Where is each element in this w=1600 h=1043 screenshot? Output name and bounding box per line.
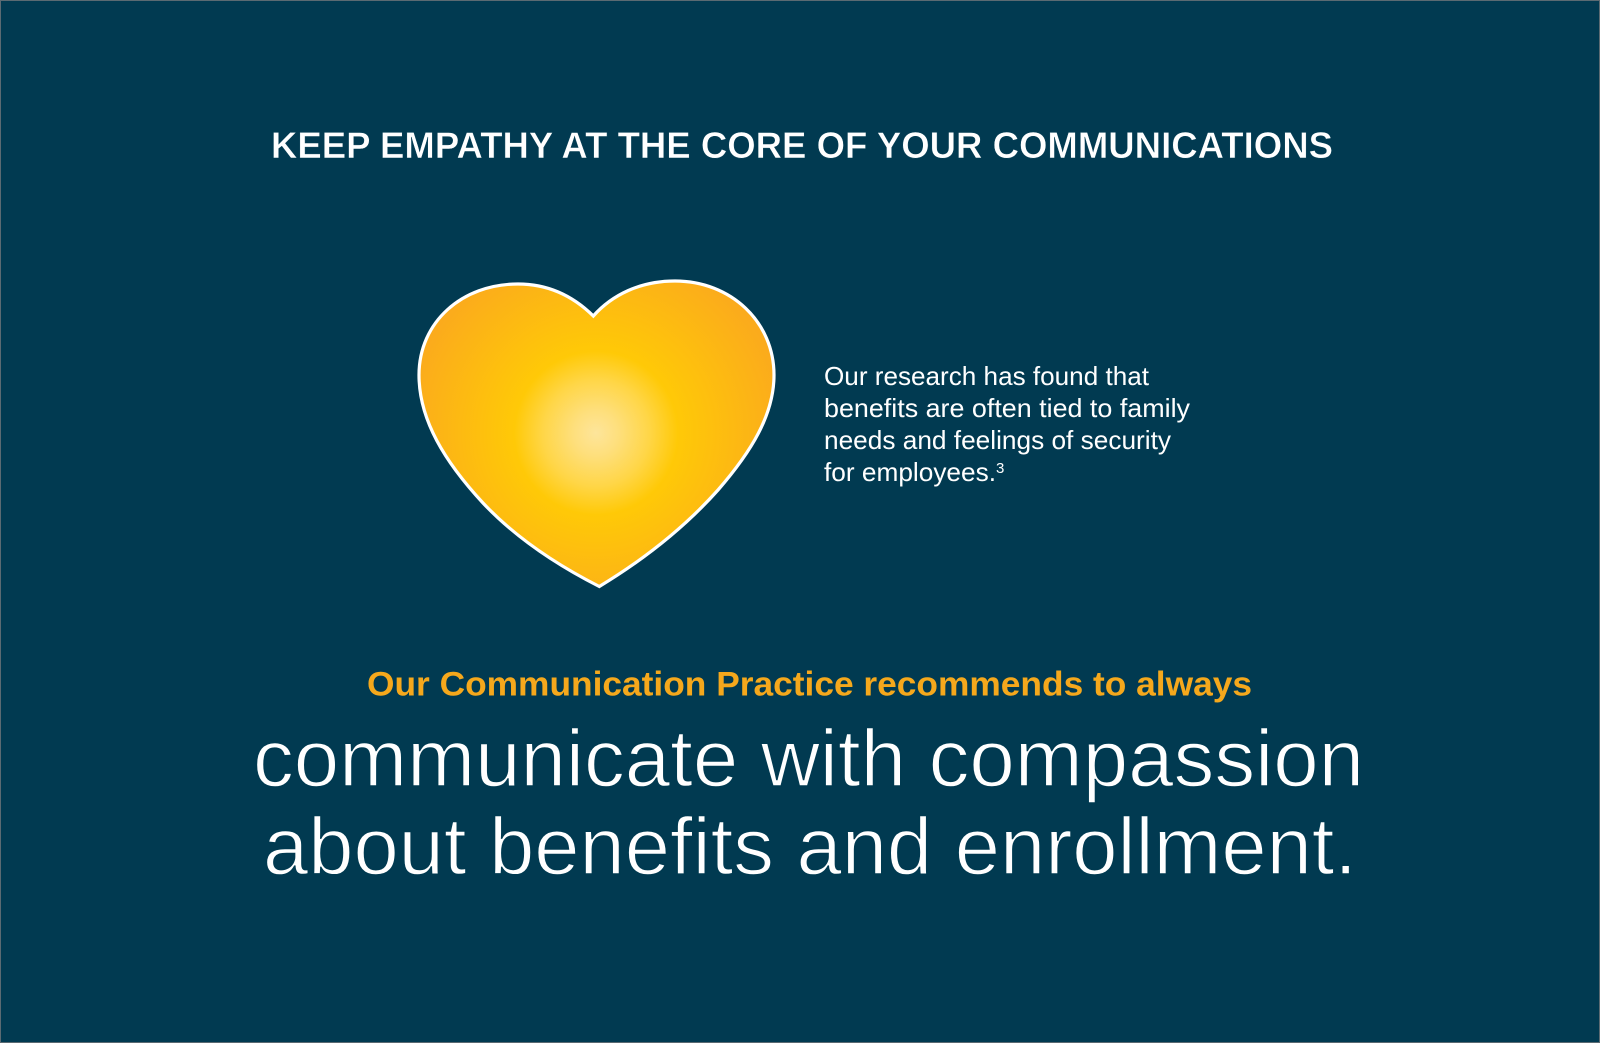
- headline: communicate with compassion: [253, 714, 1364, 892]
- subheading: recommendation intro: Our Communication Practice recommends to always: [367, 666, 1252, 704]
- headline: communicate with compassion: communicate with compassion: [253, 714, 1364, 804]
- text block: research finding: benefits are often tied to family: [824, 393, 1190, 423]
- text block: research finding: [824, 361, 1190, 487]
- text block: research finding: for employees.: [824, 457, 996, 487]
- headline: communicate with compassion: about benefits and enrollment.: [263, 802, 1357, 892]
- text block: research finding: Our research has found that: [824, 361, 1150, 391]
- text block: research finding: 3: [996, 460, 1004, 477]
- icon: glowing heart: [419, 281, 774, 586]
- title: KEEP EMPATHY AT THE CORE OF YOUR COMMUNICATIONS: [271, 125, 1333, 166]
- text block: research finding: needs and feelings of security: [824, 425, 1171, 455]
